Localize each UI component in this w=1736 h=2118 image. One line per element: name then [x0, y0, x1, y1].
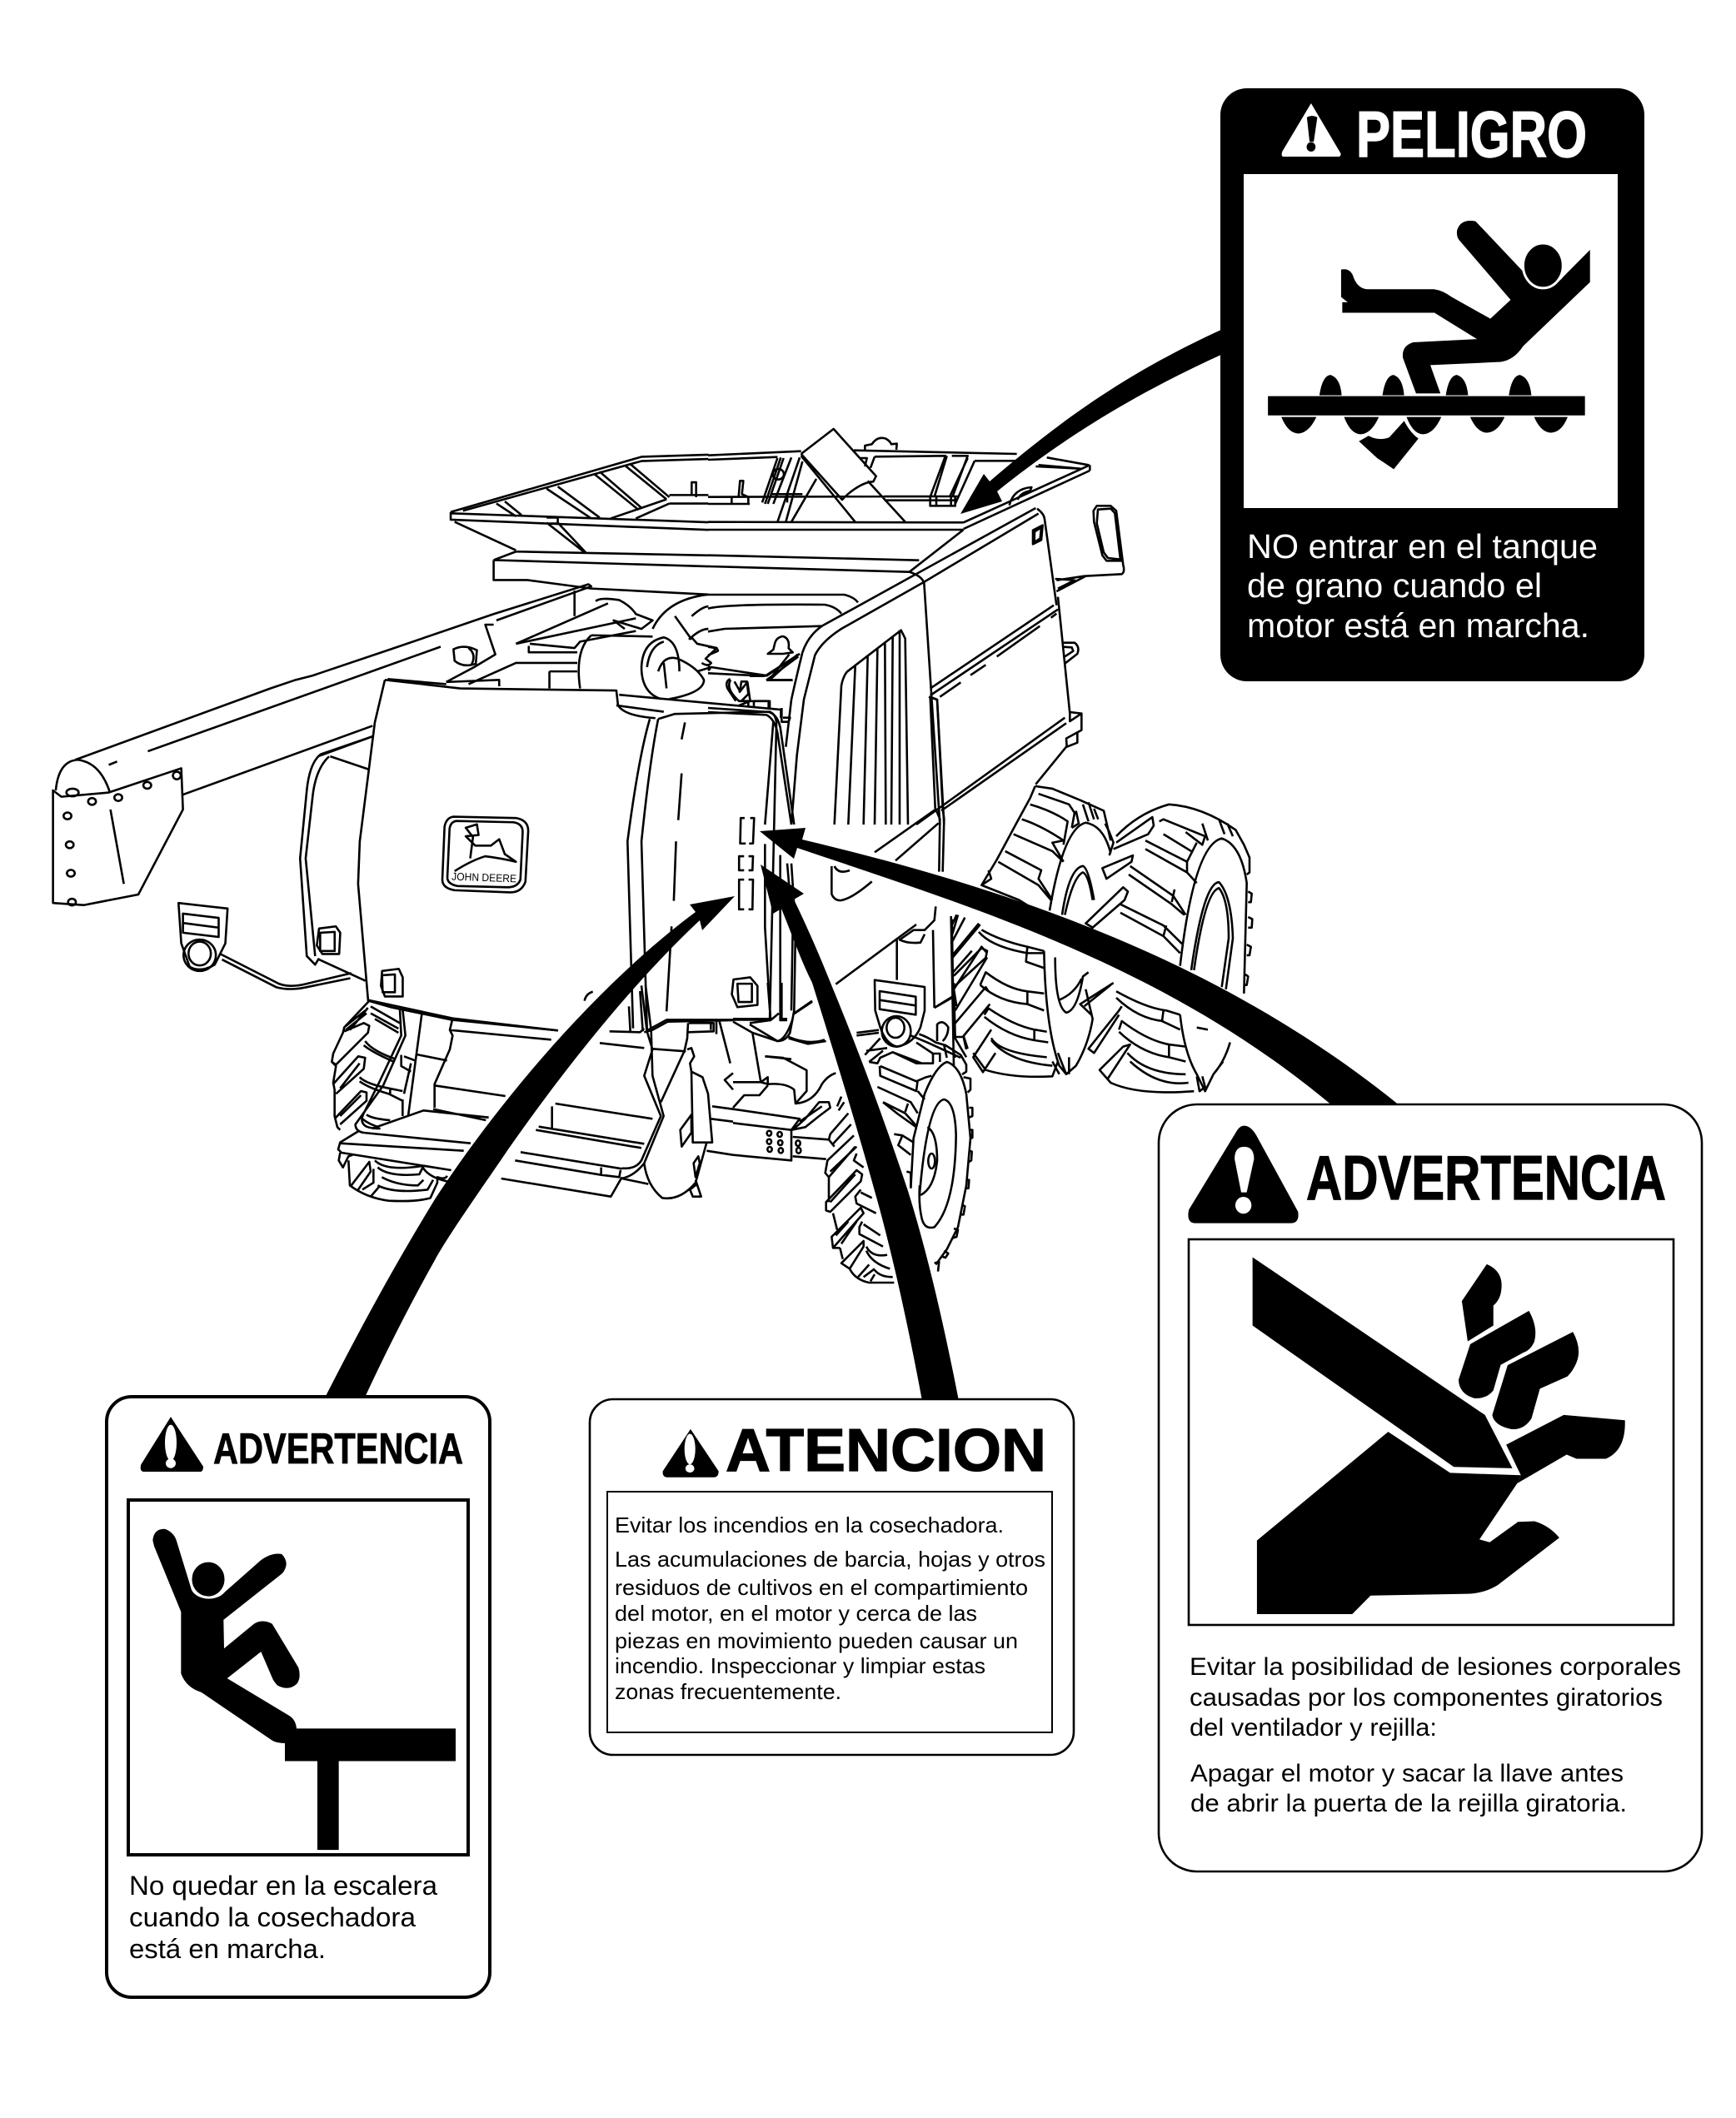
text: ladder instructions: cuando la cosechadora [129, 1902, 416, 1932]
label position markers [739, 818, 754, 909]
picture box: person falling into auger [1244, 174, 1618, 508]
unloading auger, hood and rear of machine [53, 455, 798, 1030]
text: ladder instructions [129, 1871, 437, 1964]
picture box: person falling from ladder [128, 1500, 468, 1855]
heading: advertencia: ADVERTENCIA [213, 1425, 463, 1473]
text box: fire prevention: residuos de cultivos en el compartimiento [615, 1575, 1028, 1600]
text box: fire prevention: incendio. Inspeccionar y limpiar estas [615, 1653, 985, 1678]
hood latches [317, 926, 340, 954]
text: ladder instructions: No quedar en la escalera [129, 1871, 437, 1901]
text: fan instructions: Apagar el motor y sacar la llave antes [1190, 1760, 1624, 1787]
panel: advertencia ladder [107, 1397, 490, 1997]
arrow: peligro label to grain tank [960, 329, 1223, 514]
John Deere logo [442, 817, 528, 892]
front right wheel and axle [733, 983, 972, 1283]
picture box: hand and rotating blade [1189, 1239, 1674, 1625]
text: fan instructions: de abrir la puerta de la rejilla giratoria. [1190, 1790, 1627, 1817]
text: peligro instructions: NO entrar en el tanque [1247, 527, 1598, 566]
text: fan instructions [1190, 1653, 1681, 1817]
text: fan instructions: causadas por los componentes giratorios [1190, 1684, 1663, 1712]
icon: warning triangle [141, 1417, 203, 1472]
text: peligro instructions [1247, 527, 1598, 645]
John Deere logo text: JOHN DEERE [451, 870, 517, 885]
arrow: ladder advertencia label to machine [324, 896, 735, 1399]
text box: fire prevention: piezas en movimiento pueden causar un [615, 1628, 1018, 1653]
text box: fire prevention: Evitar los incendios en la cosechadora. [615, 1513, 1004, 1537]
heading: peligro: PELIGRO [1356, 97, 1587, 171]
panel: advertencia fan [1159, 1104, 1702, 1871]
icon: warning triangle [663, 1429, 719, 1478]
engine deck [446, 595, 708, 689]
heading: atencion: ATENCION [726, 1418, 1046, 1484]
panel: peligro [1220, 88, 1644, 681]
icon: warning triangle [1282, 103, 1341, 157]
text: ladder instructions: está en marcha. [129, 1934, 326, 1964]
dual drive wheels, right side [952, 786, 1252, 1092]
rear left wheel, platform and step [332, 985, 733, 1201]
hopper left half [451, 455, 708, 616]
text box: fire prevention [607, 1492, 1052, 1732]
arrow: fan advertencia label to machine [760, 828, 1400, 1106]
panel: atencion [590, 1399, 1074, 1755]
text box: fire prevention: del motor, en el motor y cerca de las [615, 1601, 977, 1626]
left lamp and cable [178, 903, 352, 989]
lower cab, right lamp and wheel well [750, 654, 987, 1066]
text: peligro instructions: de grano cuando el [1247, 566, 1542, 605]
text box: fire prevention: Las acumulaciones de barcia, hojas y otros [615, 1547, 1045, 1572]
hopper right half, grain tank side and cab [708, 429, 1124, 825]
combine harvester line drawing [53, 429, 1252, 1283]
text: fan instructions: Evitar la posibilidad de lesiones corporales [1190, 1653, 1681, 1681]
text box: fire prevention: zonas frecuentemente. [615, 1679, 841, 1704]
icon: warning triangle [1188, 1126, 1299, 1223]
text: fan instructions: del ventilador y rejilla: [1190, 1714, 1437, 1742]
arrow: atencion label to machine [761, 865, 959, 1401]
text: peligro instructions: motor está en marcha. [1247, 606, 1589, 645]
